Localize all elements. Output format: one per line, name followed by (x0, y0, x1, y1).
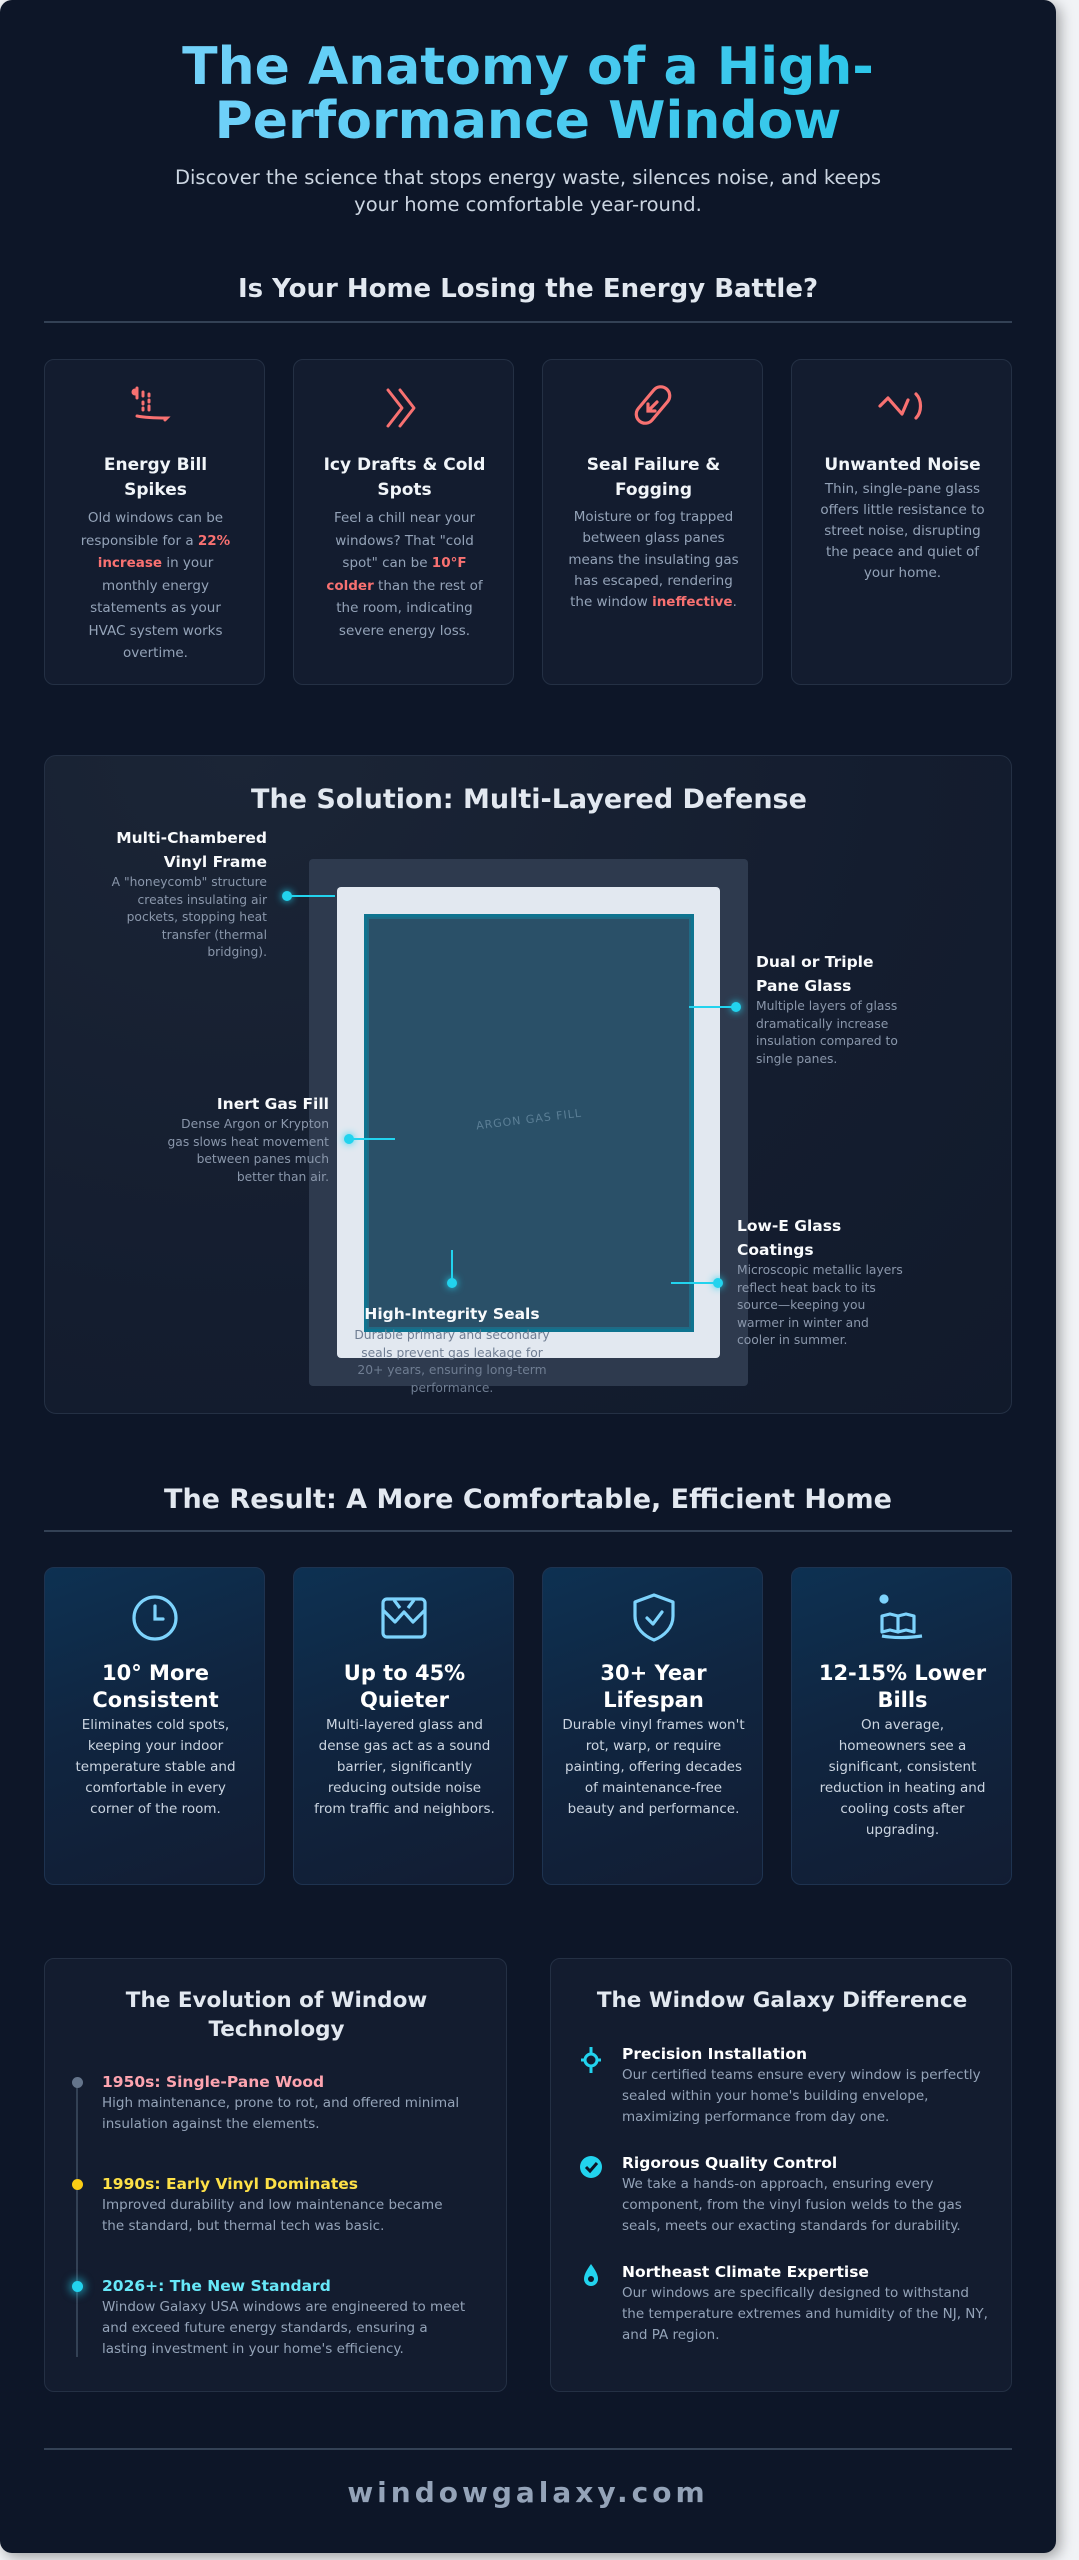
card: energy bill: Energy Bill (104, 455, 207, 475)
panel: difference: Precision Installation (622, 2045, 807, 2063)
panel: evolution timeline (44, 1958, 507, 2392)
label: dual pane: Dual or Triple (756, 953, 874, 971)
label: inert gas: Dense Argon or Krypton gas slows heat movement between panes much better than air. (167, 1117, 329, 1184)
card: consistent: Consistent (92, 1688, 219, 1712)
panel: evolution timeline: 1990s: Early Vinyl Dominates (102, 2175, 358, 2193)
label: vinyl frame: Vinyl Frame (164, 853, 267, 871)
item: precision (581, 2045, 981, 2125)
heading: solution: The Solution: Multi-Layered Defense (251, 784, 807, 815)
timeline item: 1990s (72, 2175, 443, 2234)
icon: target (581, 2047, 601, 2073)
footer: windowgalaxy.com (347, 2476, 709, 2509)
card: consistent (44, 1567, 265, 1885)
icon: money (879, 1594, 922, 1640)
label: seals (354, 1250, 550, 1395)
panel: result cards (44, 1567, 1012, 1885)
subtitle: Discover the science that stops energy waste, silences noise, and keeps your home comfortable year-round. (175, 166, 881, 216)
card: bills: 12-15% Lower (819, 1661, 986, 1685)
panel: difference (550, 1958, 1012, 2392)
card: quieter: Quieter (360, 1688, 449, 1712)
panel: difference: Northeast Climate Expertise (622, 2263, 869, 2281)
timeline item: 1950s (72, 2073, 459, 2132)
label: dual pane: Pane Glass (756, 977, 851, 995)
label: inert gas: Inert Gas Fill (217, 1095, 329, 1113)
icon: chevrons (386, 388, 416, 428)
label: low-e (671, 1217, 903, 1347)
panel: difference: Our certified teams ensure every window is perfectly sealed within your home's building envelope, maximizing performance from day one. (622, 2067, 981, 2125)
heading: result: The Result: A More Comfortable, Efficient Home (164, 1484, 892, 1515)
card: quieter: Up to 45% (344, 1661, 465, 1685)
panel: evolution timeline: 1950s: Single-Pane Wood (102, 2073, 324, 2091)
card: seal failure (542, 359, 763, 685)
card: lifespan (542, 1567, 763, 1885)
title (80, 40, 976, 148)
card: bills: On average, homeowners see a significant, consistent reduction in heating and cooling costs after upgrading. (820, 1717, 985, 1838)
window diagram (309, 859, 748, 1386)
panel: difference: We take a hands-on approach, ensuring every component, from the vinyl fusion welds to the gas seals, meets our exacting standards for durability. (622, 2176, 962, 2234)
item: climate (584, 2263, 988, 2343)
card: bills: Bills (877, 1688, 928, 1712)
card: consistent: 10° More (102, 1661, 209, 1685)
panel: evolution timeline: Window Galaxy USA windows are engineered to meet and exceed future energy standards, ensuring a lasting investment in your home's efficiency. (102, 2299, 465, 2357)
icon: shield (633, 1593, 675, 1642)
label: seals: Durable primary and secondary seals prevent gas leakage for 20+ years, ensuring long-term performance. (354, 1328, 550, 1395)
label: low-e: Coatings (737, 1241, 814, 1259)
label: vinyl frame: Multi-Chambered (116, 829, 267, 847)
heading: difference: The Window Galaxy Difference (597, 1988, 967, 2013)
card: lifespan: Durable vinyl frames won't rot, warp, or require painting, offering decades of maintenance-free beauty and performance. (562, 1717, 745, 1817)
card: noise (791, 359, 1012, 685)
label: dual pane: Multiple layers of glass dramatically increase insulation compared to single panes. (756, 999, 898, 1066)
icon: capsule (634, 385, 672, 425)
label: inert gas (167, 1095, 395, 1184)
card: energy bill: Spikes (124, 480, 187, 500)
card: energy bill: Old windows can be responsible for a 22% increase in your monthly energy statements as your HVAC system works overtime. (81, 510, 230, 661)
title: The Anatomy of a High- (182, 37, 874, 97)
panel: solution (44, 755, 1012, 1414)
item: quality (580, 2154, 962, 2234)
icon: drop (584, 2264, 598, 2286)
icon: bill (132, 386, 170, 422)
label: seals: High-Integrity Seals (364, 1305, 540, 1323)
card: lifespan: 30+ Year (600, 1661, 707, 1685)
card: noise: Thin, single-pane glass offers little resistance to street noise, disrupting the peace and quiet of your home. (820, 481, 985, 581)
card: drafts (293, 359, 514, 685)
card: noise: Unwanted Noise (824, 455, 981, 475)
icon: check badge (580, 2156, 602, 2178)
panel: difference: Our windows are specifically designed to withstand the temperature extremes and humidity of the NJ, NY, and PA region. (622, 2285, 988, 2343)
panel: evolution timeline: 2026+: The New Standard (102, 2277, 331, 2295)
label: low-e: Microscopic metallic layers reflect heat back to its source—keeping you warmer in winter and cooler in summer. (737, 1263, 903, 1347)
panel: difference: Rigorous Quality Control (622, 2154, 837, 2172)
card: drafts: Spots (377, 480, 432, 500)
window frame (337, 887, 720, 1358)
argon label: ARGON GAS FILL (475, 1107, 583, 1132)
label: dual pane (689, 953, 898, 1066)
card: seal failure: Moisture or fog trapped between glass panes means the insulating gas has escaped, rendering the window ineffective. (568, 509, 739, 610)
card: quieter (293, 1567, 514, 1885)
panel: evolution timeline: High maintenance, prone to rot, and offered minimal insulation against the elements. (102, 2095, 459, 2132)
heading: evolution (126, 1988, 427, 2042)
card: quieter: Multi-layered glass and dense gas act as a sound barrier, significantly reducing outside noise from traffic and neighbors. (314, 1717, 495, 1817)
card: drafts: Icy Drafts & Cold (324, 455, 485, 475)
glass pane (364, 914, 694, 1332)
timeline item: 2026 (64, 2274, 465, 2357)
icon: wave (878, 392, 922, 420)
heading: problems: Is Your Home Losing the Energy Battle? (238, 274, 818, 304)
card: lifespan: Lifespan (603, 1688, 704, 1712)
heading: evolution: Technology (208, 2017, 345, 2042)
panel: evolution timeline: Improved durability and low maintenance became the standard, but thermal tech was basic. (102, 2197, 443, 2234)
label: vinyl frame (112, 829, 335, 959)
panel: problem cards (44, 359, 1012, 685)
card: bills (791, 1567, 1012, 1885)
card: drafts: Feel a chill near your windows? That "cold spot" can be 10°F colder than the rest of the room, indicating severe energy loss. (326, 510, 483, 638)
heading: evolution: The Evolution of Window (126, 1988, 427, 2013)
card: seal failure: Seal Failure & (587, 455, 720, 475)
icon: window (381, 1597, 427, 1639)
label: low-e: Low-E Glass (737, 1217, 841, 1235)
card: consistent: Eliminates cold spots, keeping your indoor temperature stable and comfortable in every corner of the room. (75, 1717, 236, 1817)
label: vinyl frame: A "honeycomb" structure creates insulating air pockets, stopping heat transfer (thermal bridging). (112, 875, 267, 959)
title: Performance Window (215, 91, 841, 151)
card: seal failure: Fogging (615, 480, 692, 500)
icon: clock (132, 1595, 178, 1641)
card: energy bill (44, 359, 265, 685)
